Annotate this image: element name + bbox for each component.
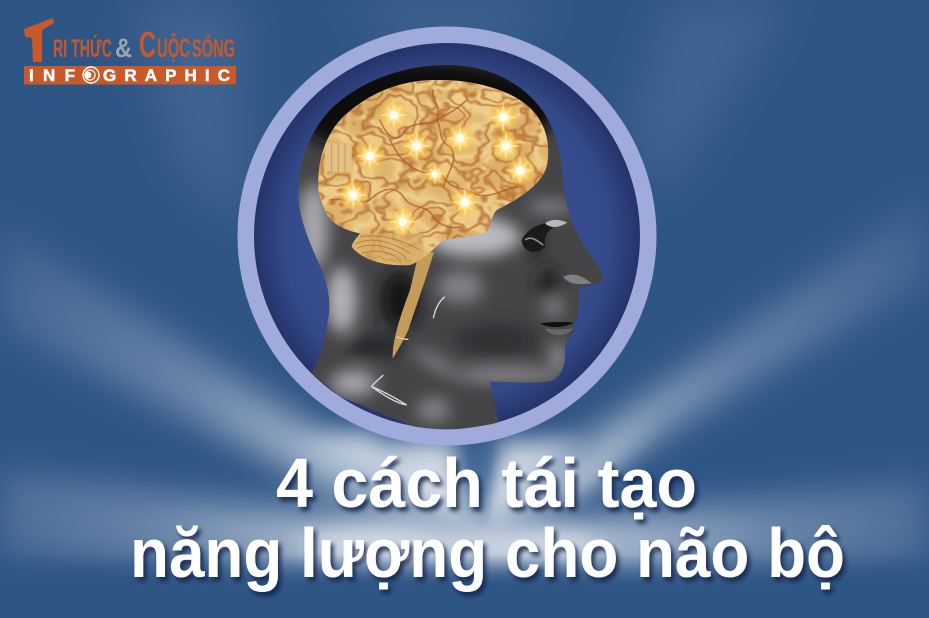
patch xyxy=(325,143,352,172)
logo wordmark: RI THỨC xyxy=(53,33,112,63)
title line 2: năng lượng cho não bộ xyxy=(130,514,845,592)
logo wordmark: UỘC xyxy=(157,32,190,63)
brain sparks xyxy=(337,99,536,238)
head silhouette xyxy=(298,65,604,430)
neck highlights xyxy=(372,297,445,405)
logo: Tri Thức & Cuộc Sống Infographic: GRAPHIC xyxy=(103,66,230,85)
logo: Tri Thức & Cuộc Sống Infographic xyxy=(24,18,236,85)
logo wordmark: C xyxy=(139,24,156,65)
logo icon: T xyxy=(24,18,54,62)
portrait medallion xyxy=(230,20,670,450)
head and brain illustration xyxy=(298,65,604,430)
cortex folds xyxy=(330,90,517,228)
nose and lips xyxy=(563,275,592,284)
medallion ring xyxy=(238,26,656,446)
logo wordmark xyxy=(53,24,235,65)
cerebellum lines xyxy=(350,233,423,267)
logo icon: swirl O xyxy=(83,67,99,83)
title line 1: 4 cách tái tạo xyxy=(276,444,697,522)
brain xyxy=(313,77,553,270)
eye xyxy=(522,223,554,252)
logo banner xyxy=(24,66,236,84)
spinal cord xyxy=(393,252,434,358)
title xyxy=(130,444,845,592)
logo: Tri Thức & Cuộc Sống Infographic: INF xyxy=(29,66,75,85)
logo wordmark: SỐNG xyxy=(192,33,235,63)
logo wordmark: & xyxy=(115,33,132,63)
